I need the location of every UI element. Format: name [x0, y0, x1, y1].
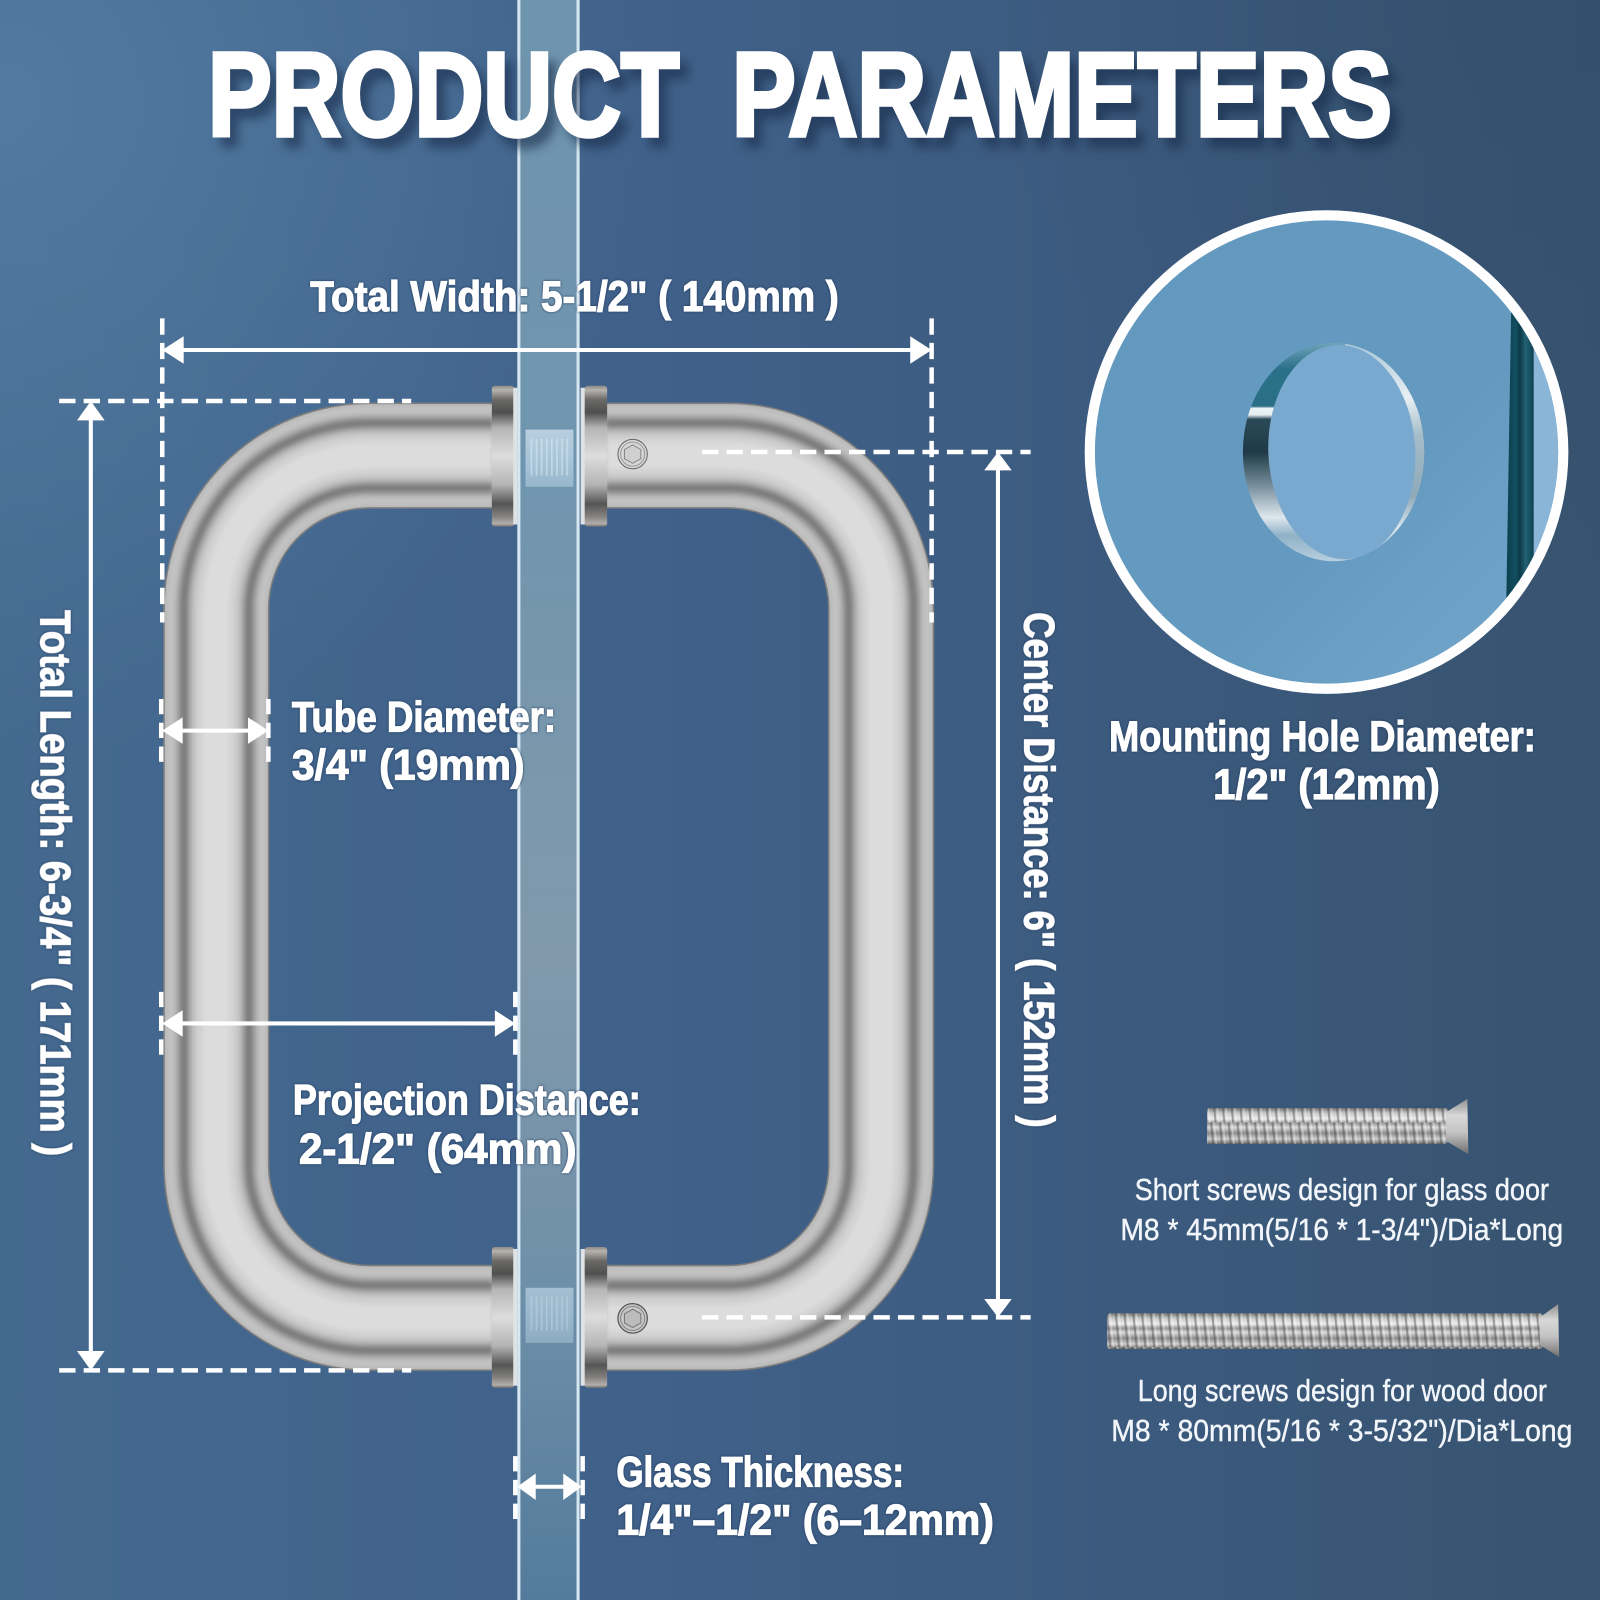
tube diameter label: Tube Diameter:: [292, 694, 556, 742]
door handle: [216, 386, 881, 1388]
icon: long screw: [1107, 1304, 1559, 1357]
icon: bottom hex set screw: [618, 1304, 647, 1333]
left half of tube: [216, 456, 493, 1318]
glass thickness label: [616, 1449, 994, 1545]
arrow: tube diameter: [161, 699, 268, 762]
tube diameter dimension: [161, 694, 556, 790]
top thread through glass: [526, 430, 573, 487]
glass thickness label: Glass Thickness:: [616, 1449, 904, 1497]
projection distance label: [293, 1076, 641, 1173]
panel: mounting hole close-up: [1085, 204, 1571, 714]
long screw caption: Long screws design for wood door: [1138, 1375, 1547, 1408]
arrow: center distance: [984, 452, 1012, 1317]
mounting hole label: [1109, 713, 1536, 809]
projection distance label: Projection Distance:: [293, 1076, 641, 1124]
white ring: [1085, 210, 1568, 694]
icon: top hex set screw: [618, 439, 647, 469]
total length label: Total Length: 6-3/4" ( 171mm ): [31, 610, 79, 1156]
extension lines: total length: [59, 401, 411, 1370]
tube diameter label: 3/4" (19mm): [292, 742, 524, 790]
extension lines: total width: [162, 318, 932, 622]
extension lines: center distance: [702, 452, 1031, 1317]
long screw caption: [1111, 1375, 1572, 1448]
icon: drilled hole: [1243, 341, 1424, 563]
mounting hole label: 1/2" (12mm): [1213, 761, 1440, 809]
short screw caption: M8 * 45mm(5/16 * 1-3/4")/Dia*Long: [1120, 1214, 1563, 1247]
top mounting flanges: [492, 386, 607, 527]
total length dimension: [31, 401, 411, 1370]
arrow: glass thickness: [515, 1456, 583, 1520]
glass thickness label: 1/4"–1/2" (6–12mm): [616, 1497, 994, 1545]
bottom thread through glass: [526, 1288, 573, 1343]
center distance dimension: [702, 452, 1062, 1317]
bottom mounting flanges: [492, 1247, 607, 1388]
icon: short screw: [1207, 1099, 1468, 1154]
tube diameter label: [292, 694, 556, 790]
right half of tube: [606, 456, 881, 1318]
short screw caption: [1120, 1174, 1563, 1247]
center distance label: Center Distance: 6" ( 152mm ): [1014, 612, 1062, 1128]
glass edge bar: [1506, 312, 1558, 598]
arrow: total length: [77, 401, 105, 1370]
projection distance dimension: [161, 992, 641, 1173]
short screw caption: Short screws design for glass door: [1135, 1174, 1549, 1207]
glass panel: [517, 0, 580, 1600]
total width dimension: [162, 273, 932, 622]
total width label: Total Width: 5-1/2" ( 140mm ): [310, 273, 839, 321]
arrow: total width: [162, 336, 932, 364]
glass thickness dimension: [515, 1449, 994, 1545]
long screw caption: M8 * 80mm(5/16 * 3-5/32")/Dia*Long: [1111, 1415, 1572, 1448]
glass disc: [1095, 220, 1558, 684]
arrow: projection distance: [161, 992, 515, 1055]
projection distance label: 2-1/2" (64mm): [299, 1125, 577, 1173]
